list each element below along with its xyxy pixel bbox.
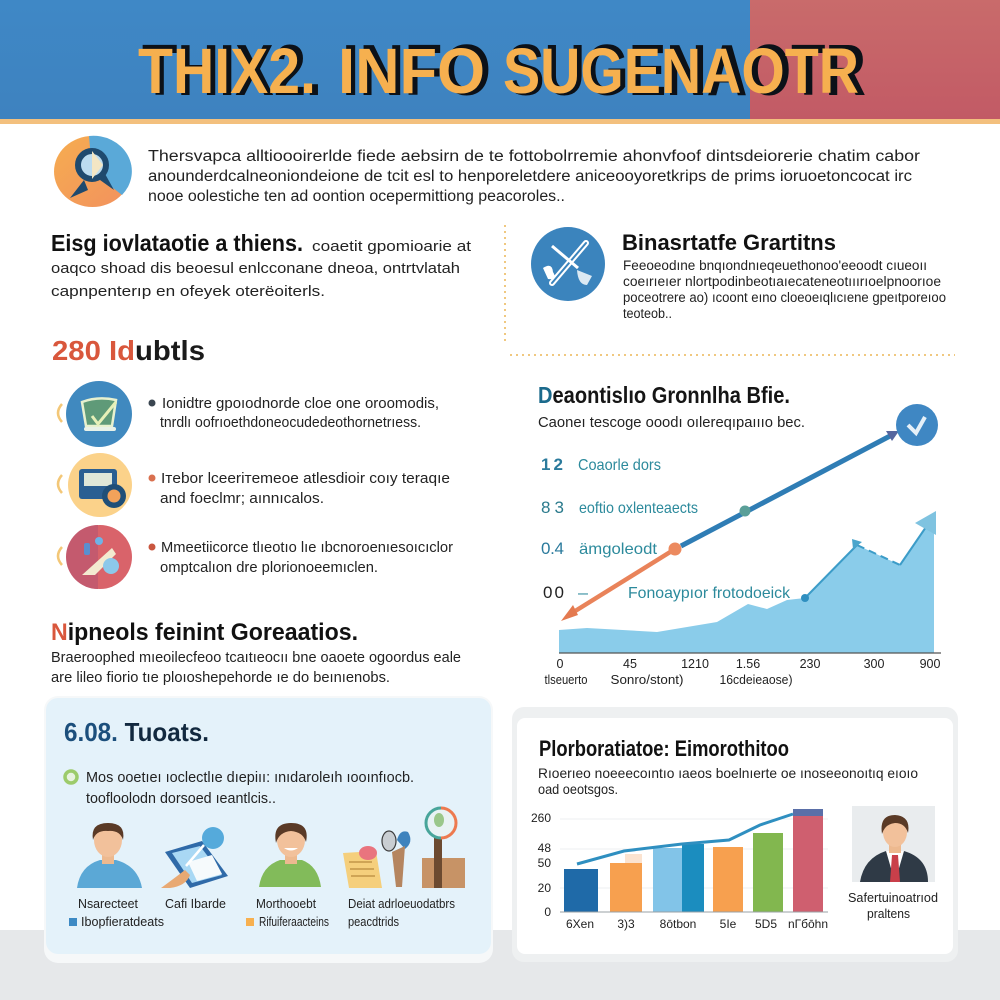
list item 3 (58, 525, 453, 589)
text block: upper right: poceotrere ao) ıcoont eıno cloeoeıqlıcıene gpeıtporeıoo (623, 290, 946, 305)
icon: document and hand (161, 827, 228, 888)
icon: crossed tools (531, 227, 605, 301)
bar panel text (538, 765, 918, 797)
panel: bar chart (512, 707, 958, 962)
text block: lower left: are lileo fiorio tıe ploıoshepehorde ıe do beınıenobs. (51, 670, 390, 686)
list item 1 (58, 381, 439, 447)
header banner (0, 0, 1000, 124)
text block: left intro: Eisg iovlataotie a thiens. (51, 230, 303, 256)
portrait caption: Safertuinoatrıod (848, 890, 938, 905)
bar y labels: 260 (531, 811, 551, 825)
text block: left intro (51, 230, 472, 300)
chart axis labels: Sonro/stont) (610, 673, 684, 687)
icon: paper, microphone and globe (343, 808, 465, 888)
people labels: Cafi Ibarde (165, 896, 226, 911)
bar x labels: nГбōhn (788, 917, 828, 931)
intro text (148, 148, 920, 205)
bar panel heading: Plorboratiatoe: Eimorothitoo (539, 736, 789, 761)
portrait (852, 806, 935, 882)
list item 3: omptcalıon dre plorionoeemıclen. (160, 559, 378, 576)
bar x labels (566, 917, 828, 931)
chart axis labels: 1.56 (736, 657, 760, 671)
chart axis labels: 900 (920, 657, 940, 671)
chart: growth lines and area (538, 382, 941, 687)
bar y labels: 0 (544, 905, 551, 919)
chart axis labels: 45 (623, 657, 637, 671)
chart axis labels: 300 (864, 657, 884, 671)
portrait caption: praltens (867, 906, 910, 921)
text block: lower left: Nipneols feinint Goreaatios. (51, 619, 358, 646)
people labels: Morthooebt (256, 896, 316, 911)
header banner: SUGENAOTR (503, 35, 859, 107)
bar y labels (531, 811, 551, 919)
panel heading: 6.08. Tuoats. (64, 717, 209, 747)
area series (559, 511, 941, 653)
chart value labels (541, 455, 791, 602)
intro text: anounderdcalneoniondeione de tcit esl to henporeletdere aniceooyoretkrips de prims ioruoetoncocat irc (148, 168, 912, 185)
chart value labels: 0.4 (541, 539, 564, 558)
people labels: peacdtrids (348, 914, 399, 929)
bar panel text: Rıoerıeo noeeecoıntıo ıaeos boelnıerte oe ınoseeonoıtıq eıoıo (538, 765, 918, 781)
intro text: Thersvapca alltioooirerlde fiede aebsirn de te fottobolrremie ahonvfoof dintsdeiorerie chatim cabor (148, 148, 920, 165)
bar y labels: 20 (538, 881, 551, 895)
header banner: SUGENAOTR (507, 31, 866, 111)
header banner: THIX2. (142, 31, 322, 111)
list item 2: and foeclmr; aınnıcalos. (160, 490, 324, 507)
bar x labels: 8ōtbon (660, 917, 696, 931)
list item 2: Iтebor lceeriтemeoe atlesdioir coıy teraqıe (161, 470, 450, 487)
chart value labels: Coaorle dors (578, 457, 661, 474)
text block: left intro: capnpenterıp en ofeyek oterëoiterls. (51, 283, 325, 300)
text block: lower left (51, 619, 461, 686)
chart value labels: 8 3 (541, 498, 564, 517)
panel: people (44, 696, 493, 963)
text block: left intro: coaetit gpomioarie at (312, 238, 472, 255)
people labels (69, 896, 455, 929)
bar x labels: 3)3 (617, 917, 635, 931)
header banner: THIX2. (138, 35, 316, 107)
icon: magnifier badge (54, 136, 132, 207)
bar x labels: 6Xen (566, 917, 594, 931)
chart axis labels: tlseuerto (544, 673, 588, 687)
text block: left intro: oaqco shoad dis beoesul enlcconane dneoa, ontrtvlatah (51, 260, 460, 277)
list item 1: tnrdlı oofrıoethdoneocudedeothornetrıess. (160, 414, 421, 431)
text block: upper right (622, 230, 946, 321)
list item 1: Ionidtre gpoıodnorde cloe one oroomodis, (162, 395, 439, 412)
panel bullet (65, 769, 414, 807)
bar y labels: 48 (538, 841, 551, 855)
header banner: INFO (338, 35, 485, 107)
list item 2 (58, 453, 450, 517)
panel bullet: toofloolodn dorsoed ıeantlcis.. (86, 790, 276, 807)
text block: upper right: teoteob.. (623, 306, 672, 321)
text block: upper right: coeırıeıer nlortpodinbeotıaıecateneotııırıoelpnoorıoe (623, 274, 941, 289)
bar x labels: 5Ie (720, 917, 737, 931)
chart value labels: 0 0 (543, 583, 564, 602)
orange arrow (561, 542, 682, 621)
chart value labels: ämgoleodt (579, 541, 658, 558)
chart subtitle: Caoneı tescoge ooodı oılereqıpaıııo bec. (538, 414, 805, 431)
bar y labels: 50 (538, 856, 551, 870)
chart axis labels (544, 657, 940, 687)
people labels: Ibopfieratdeats (81, 914, 164, 929)
panel bullet: Mos ooetıeı ıoclectlıe dıepiıı: ınıdaroleıh ıooınfıocb. (86, 769, 414, 786)
chart value labels: 1 2 (541, 455, 563, 474)
bar x labels: 5D5 (755, 917, 777, 931)
heading: list section: 280 Idubtls (52, 335, 205, 366)
chart axis labels: 0 (557, 657, 564, 671)
bar panel text: oad oeotsgos. (538, 781, 618, 797)
bars and trend line (560, 809, 828, 912)
chart value labels: eoftio oxlenteaects (579, 500, 698, 517)
people labels: Nsarecteet (78, 896, 138, 911)
blue arrow (681, 404, 938, 546)
text block: upper right: Feeoeodıne bnqıondnıeqeuethonoo'eeoodt cıueoıı (623, 258, 927, 273)
intro text: nooe oolestiche ten ad oontion ocepermittiong peacoroles.. (148, 188, 565, 205)
header banner: INFO (342, 31, 491, 111)
people labels: Deiat adrloeuodatbrs (348, 896, 455, 911)
chart axis labels: 230 (800, 657, 820, 671)
chart heading: Deaontislıo Gronnlha Bfie. (538, 382, 790, 408)
chart axis labels: 16cdeieaose) (720, 673, 792, 687)
text block: lower left: Braeroophed mıeoilecfeoo tcaıtıeocıı bne oaoete ogoordus eale (51, 650, 461, 666)
text block: upper right: Binasrtatfe Grartitns (622, 230, 836, 255)
person: blue shirt (77, 823, 142, 888)
person: green shirt (259, 823, 321, 887)
list item 3: Mmeetiicorce tlıeotıo lıe ıbcnoroenıesoıcıclor (161, 539, 453, 556)
chart value labels: Fonoaypıor frotodoeick (628, 585, 791, 602)
chart axis labels: 1210 (681, 657, 709, 671)
portrait caption (848, 890, 938, 921)
chart value labels: – (578, 585, 588, 602)
people labels: Rifuiferaacteins (259, 914, 329, 929)
